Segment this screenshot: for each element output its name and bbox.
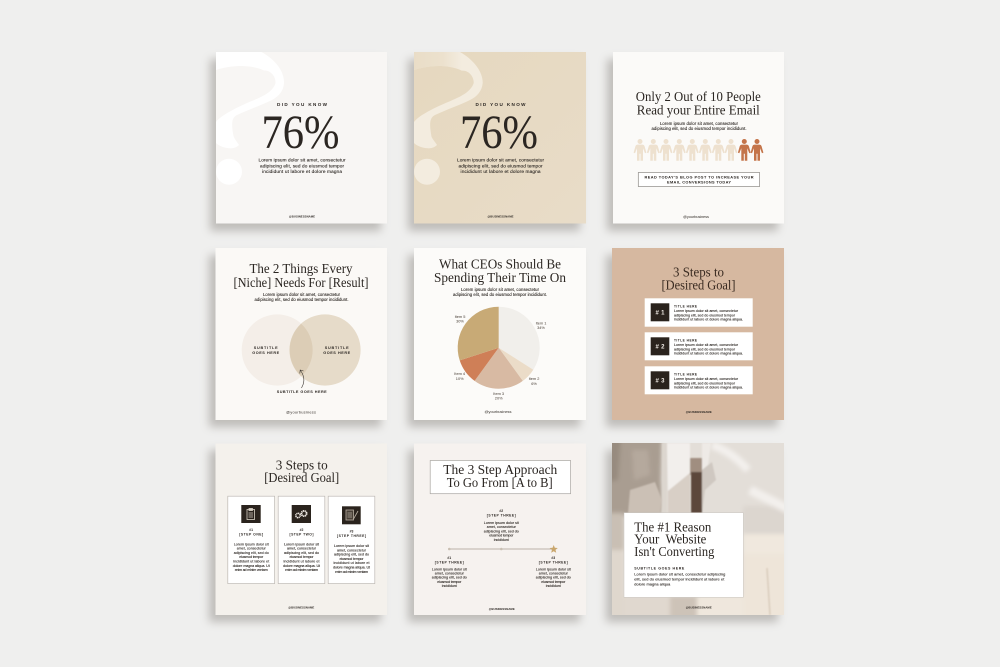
body text: Lorem ipsum dolor sit amet, consectetur	[258, 158, 346, 162]
pie labels: 20%	[495, 395, 503, 400]
pie labels: Item 1	[536, 320, 546, 326]
body text	[258, 158, 346, 174]
heading: 3 Steps to	[673, 266, 724, 281]
heading: 3 Steps to	[276, 458, 328, 473]
icon: large question mark	[210, 52, 284, 185]
caption box: SUBTITLE GOES HERE	[634, 566, 685, 570]
handle: @BUSINESSNAME	[288, 606, 314, 610]
caption box: Lorem ipsum dolor sit amet, consectetur adipiscing	[634, 572, 725, 576]
step three text: amet, consectetur	[539, 572, 569, 576]
caption box	[624, 513, 743, 597]
step card two: incididunt ut labore et dolore magna aliqua.	[674, 352, 743, 356]
eyebrow: DID YOU KNOW	[277, 102, 328, 107]
big number: 76%	[262, 106, 340, 159]
column three	[328, 496, 375, 584]
panel: photo with caption	[612, 443, 784, 615]
step one text	[432, 556, 467, 588]
pie labels: 6%	[531, 381, 537, 386]
column one: dolore magna aliqua. Ut	[233, 564, 270, 568]
step card three: #3	[656, 378, 665, 384]
step two text	[484, 509, 519, 542]
step three text	[536, 556, 571, 588]
body text	[453, 287, 547, 297]
left label	[252, 346, 280, 355]
step one text: adipiscing elit, sed do	[432, 576, 467, 580]
caption box: Your Website	[634, 533, 706, 548]
step card two: #2	[656, 344, 665, 350]
step card one: incididunt ut labore et dolore magna aliqua.	[674, 318, 743, 322]
column three: adipiscing elit, sed do	[334, 553, 369, 557]
column three: incididunt ut labore et	[334, 561, 370, 565]
body text: adipiscing elit, sed do eiusmod tempor incididunt.	[652, 126, 746, 131]
body text: Lorem ipsum dolor sit amet, consectetur	[660, 121, 739, 126]
step three text: eiusmod tempor	[541, 580, 566, 584]
body text	[457, 158, 544, 174]
column one: adipiscing elit, sed do	[234, 551, 269, 555]
column one: incididunt ut labore et	[233, 560, 269, 564]
body text	[652, 121, 746, 131]
icon: notebook and pencil	[346, 510, 358, 520]
column three: Lorem ipsum dolor sit	[334, 544, 369, 548]
heading line two: [Desired Goal]	[264, 471, 339, 486]
icon: large question mark	[408, 52, 483, 185]
pie labels: Item 2	[529, 376, 539, 381]
body text: incididunt ut labore et dolore magna	[460, 169, 541, 174]
venn circles	[242, 314, 361, 386]
caption box: dolore magna aliqua	[634, 582, 671, 587]
call to action box: READ TODAY'S BLOG POST TO INCREASE YOUR	[644, 175, 754, 180]
handle: @BUSINESSNAME	[686, 410, 712, 414]
column three: amet, consectetur	[337, 548, 367, 552]
column one: eiusmod tempor	[239, 555, 264, 559]
column three: eiusmod tempor	[340, 557, 364, 561]
step card one: Lorem ipsum dolor sit amet, consectetur	[674, 309, 739, 313]
pie labels: Item 5	[455, 314, 465, 319]
left label: SUBTITLE	[254, 346, 278, 350]
heading box: The 3 Step Approach	[443, 463, 557, 478]
body text: Lorem ipsum dolor sit amet, consectetur	[461, 287, 540, 292]
column three: enim ad minim veniam	[335, 570, 368, 574]
panel: three steps, columns	[216, 444, 387, 615]
body text: adipiscing elit, sed do eiusmod tempor	[260, 163, 344, 168]
step card three: Lorem ipsum dolor sit amet, consectetur	[674, 377, 739, 381]
heading box: To Go From [A to B]	[447, 476, 553, 491]
heading box	[430, 460, 571, 494]
handle: @yourbusiness	[484, 409, 512, 414]
step card one: TITLE HERE	[674, 304, 697, 308]
body text: Lorem ipsum dolor sit amet, consectetur	[457, 158, 544, 162]
left label: GOES HERE	[252, 351, 280, 355]
timeline	[448, 545, 558, 553]
column two: incididunt ut labore et	[284, 560, 320, 564]
pie labels: 34%	[537, 325, 545, 330]
icon: star	[550, 545, 558, 553]
column one	[228, 496, 275, 584]
panel: did you know, beige	[408, 52, 586, 224]
step two text: incididunt	[494, 538, 509, 542]
panel: venn diagram	[216, 248, 387, 420]
panel: pie chart	[414, 248, 586, 420]
right label: GOES HERE	[323, 351, 351, 355]
step three text: #3	[551, 556, 555, 560]
step three text: [STEP THREE]	[539, 560, 568, 564]
step three text: adipiscing elit, sed do	[536, 576, 571, 580]
handle: @BUSINESSNAME	[686, 605, 712, 609]
pie labels	[454, 314, 546, 400]
column one: enim ad minim veniam	[235, 568, 268, 572]
step two text: eiusmod tempor	[489, 534, 514, 538]
step card two: TITLE HERE	[674, 338, 697, 342]
body text	[254, 292, 348, 302]
pie labels: 30%	[456, 319, 464, 324]
right label: SUBTITLE	[325, 346, 349, 350]
step two text: adipiscing elit, sed do	[484, 529, 519, 533]
heading: Only 2 Out of 10 People	[636, 90, 761, 105]
step card one	[645, 298, 753, 327]
pie labels: Item 3	[493, 391, 504, 396]
pie labels: 10%	[456, 376, 464, 381]
column two: #2	[300, 528, 303, 532]
step one text: incididunt	[442, 584, 457, 588]
column three: [STEP THREE]	[337, 534, 366, 538]
column two: amet, consectetur	[287, 547, 317, 551]
pictogram: ten people, two highlighted	[634, 139, 763, 161]
panel: email statistic	[613, 52, 784, 224]
column two: Lorem ipsum dolor sit	[284, 542, 319, 546]
heading: What CEOs Should Be	[439, 258, 561, 272]
caption box: Isn't Converting	[634, 545, 714, 560]
column three: dolore magna aliqua. Ut	[333, 566, 370, 570]
handle: @BUSINESSNAME	[289, 214, 315, 218]
pie labels: Item 4	[454, 371, 466, 376]
big number: 76%	[460, 106, 538, 159]
body text: adipiscing elit, sed do eiusmod tempor incididunt.	[453, 292, 547, 297]
call to action box: EMAIL CONVERSIONS TODAY	[667, 179, 731, 184]
icon: clipboard	[247, 508, 254, 520]
step card three	[645, 366, 753, 394]
column two: dolore magna aliqua. Ut	[283, 564, 320, 568]
overlap label: SUBTITLE GOES HERE	[277, 390, 327, 394]
body text: adipiscing elit, sed do eiusmod tempor	[458, 163, 543, 168]
handle: @yourbusiness	[286, 410, 316, 415]
heading: The 2 Things Every	[250, 262, 352, 277]
call to action box	[638, 172, 760, 186]
column one: Lorem ipsum dolor sit	[234, 542, 269, 546]
panel: did you know, light	[210, 52, 387, 224]
step card two: adipiscing elit, sed do eiusmod tempor	[674, 347, 736, 351]
column two: eiusmod tempor	[290, 555, 314, 559]
right label	[323, 346, 351, 355]
arrow	[300, 370, 304, 388]
step one text: #1	[447, 556, 451, 560]
column one: amet, consectetur	[237, 547, 266, 551]
column two: enim ad minim veniam	[285, 568, 318, 572]
step two text: [STEP THREE]	[487, 513, 516, 517]
body text: incididunt ut labore et dolore magna	[262, 169, 342, 174]
step three text: Lorem ipsum dolor sit	[536, 567, 571, 571]
heading line two: Read your Entire Email	[637, 103, 760, 118]
step one text: [STEP THREE]	[435, 560, 464, 564]
photo of draped neutral clothing	[612, 443, 784, 615]
column two: adipiscing elit, sed do	[284, 551, 319, 555]
step card three: incididunt ut labore et dolore magna aliqua.	[674, 386, 743, 390]
handle: @BUSINESSNAME	[488, 214, 514, 218]
heading line two: [Niche] Needs For [Result]	[234, 276, 368, 291]
eyebrow: DID YOU KNOW	[476, 102, 526, 107]
caption box: elit, sed do eiusmod tempor incididunt ut labore et	[634, 577, 725, 582]
column one: #1	[249, 528, 253, 532]
column two: [STEP TWO]	[290, 533, 314, 537]
step card one: #1	[656, 310, 665, 316]
heading line two: Spending Their Time On	[434, 271, 566, 286]
column three: #3	[350, 530, 353, 534]
panel: three step approach timeline	[414, 444, 586, 615]
column one: [STEP ONE]	[239, 533, 263, 537]
infographic: nine social media templates	[204, 52, 784, 626]
handle: @BUSINESSNAME	[489, 607, 515, 611]
column two	[278, 496, 325, 584]
body text: adipiscing elit, sed do eiusmod tempor incididunt.	[254, 297, 348, 302]
step one text: eiusmod tempor	[437, 580, 462, 584]
caption box: The #1 Reason	[634, 521, 711, 536]
body text: Lorem ipsum dolor sit amet, consectetur	[263, 292, 341, 297]
step card one: adipiscing elit, sed do eiusmod tempor	[674, 313, 736, 317]
step two text: amet, consectetur	[487, 525, 517, 529]
step two text: Lorem ipsum dolor sit	[484, 521, 519, 525]
icon: gears	[296, 511, 307, 518]
step two text: #2	[499, 509, 503, 513]
handle: @yourbusiness	[683, 214, 709, 219]
step one text: Lorem ipsum dolor sit	[432, 567, 467, 571]
heading line two: [Desired Goal]	[662, 278, 736, 294]
step card two	[645, 332, 753, 360]
step three text: incididunt	[546, 584, 561, 588]
step one text: amet, consectetur	[435, 572, 465, 576]
panel: three steps, tan	[612, 248, 784, 420]
step card two: Lorem ipsum dolor sit amet, consectetur	[674, 343, 739, 347]
step card three: TITLE HERE	[674, 372, 697, 376]
pie chart	[458, 307, 540, 389]
step card three: adipiscing elit, sed do eiusmod tempor	[674, 381, 736, 385]
